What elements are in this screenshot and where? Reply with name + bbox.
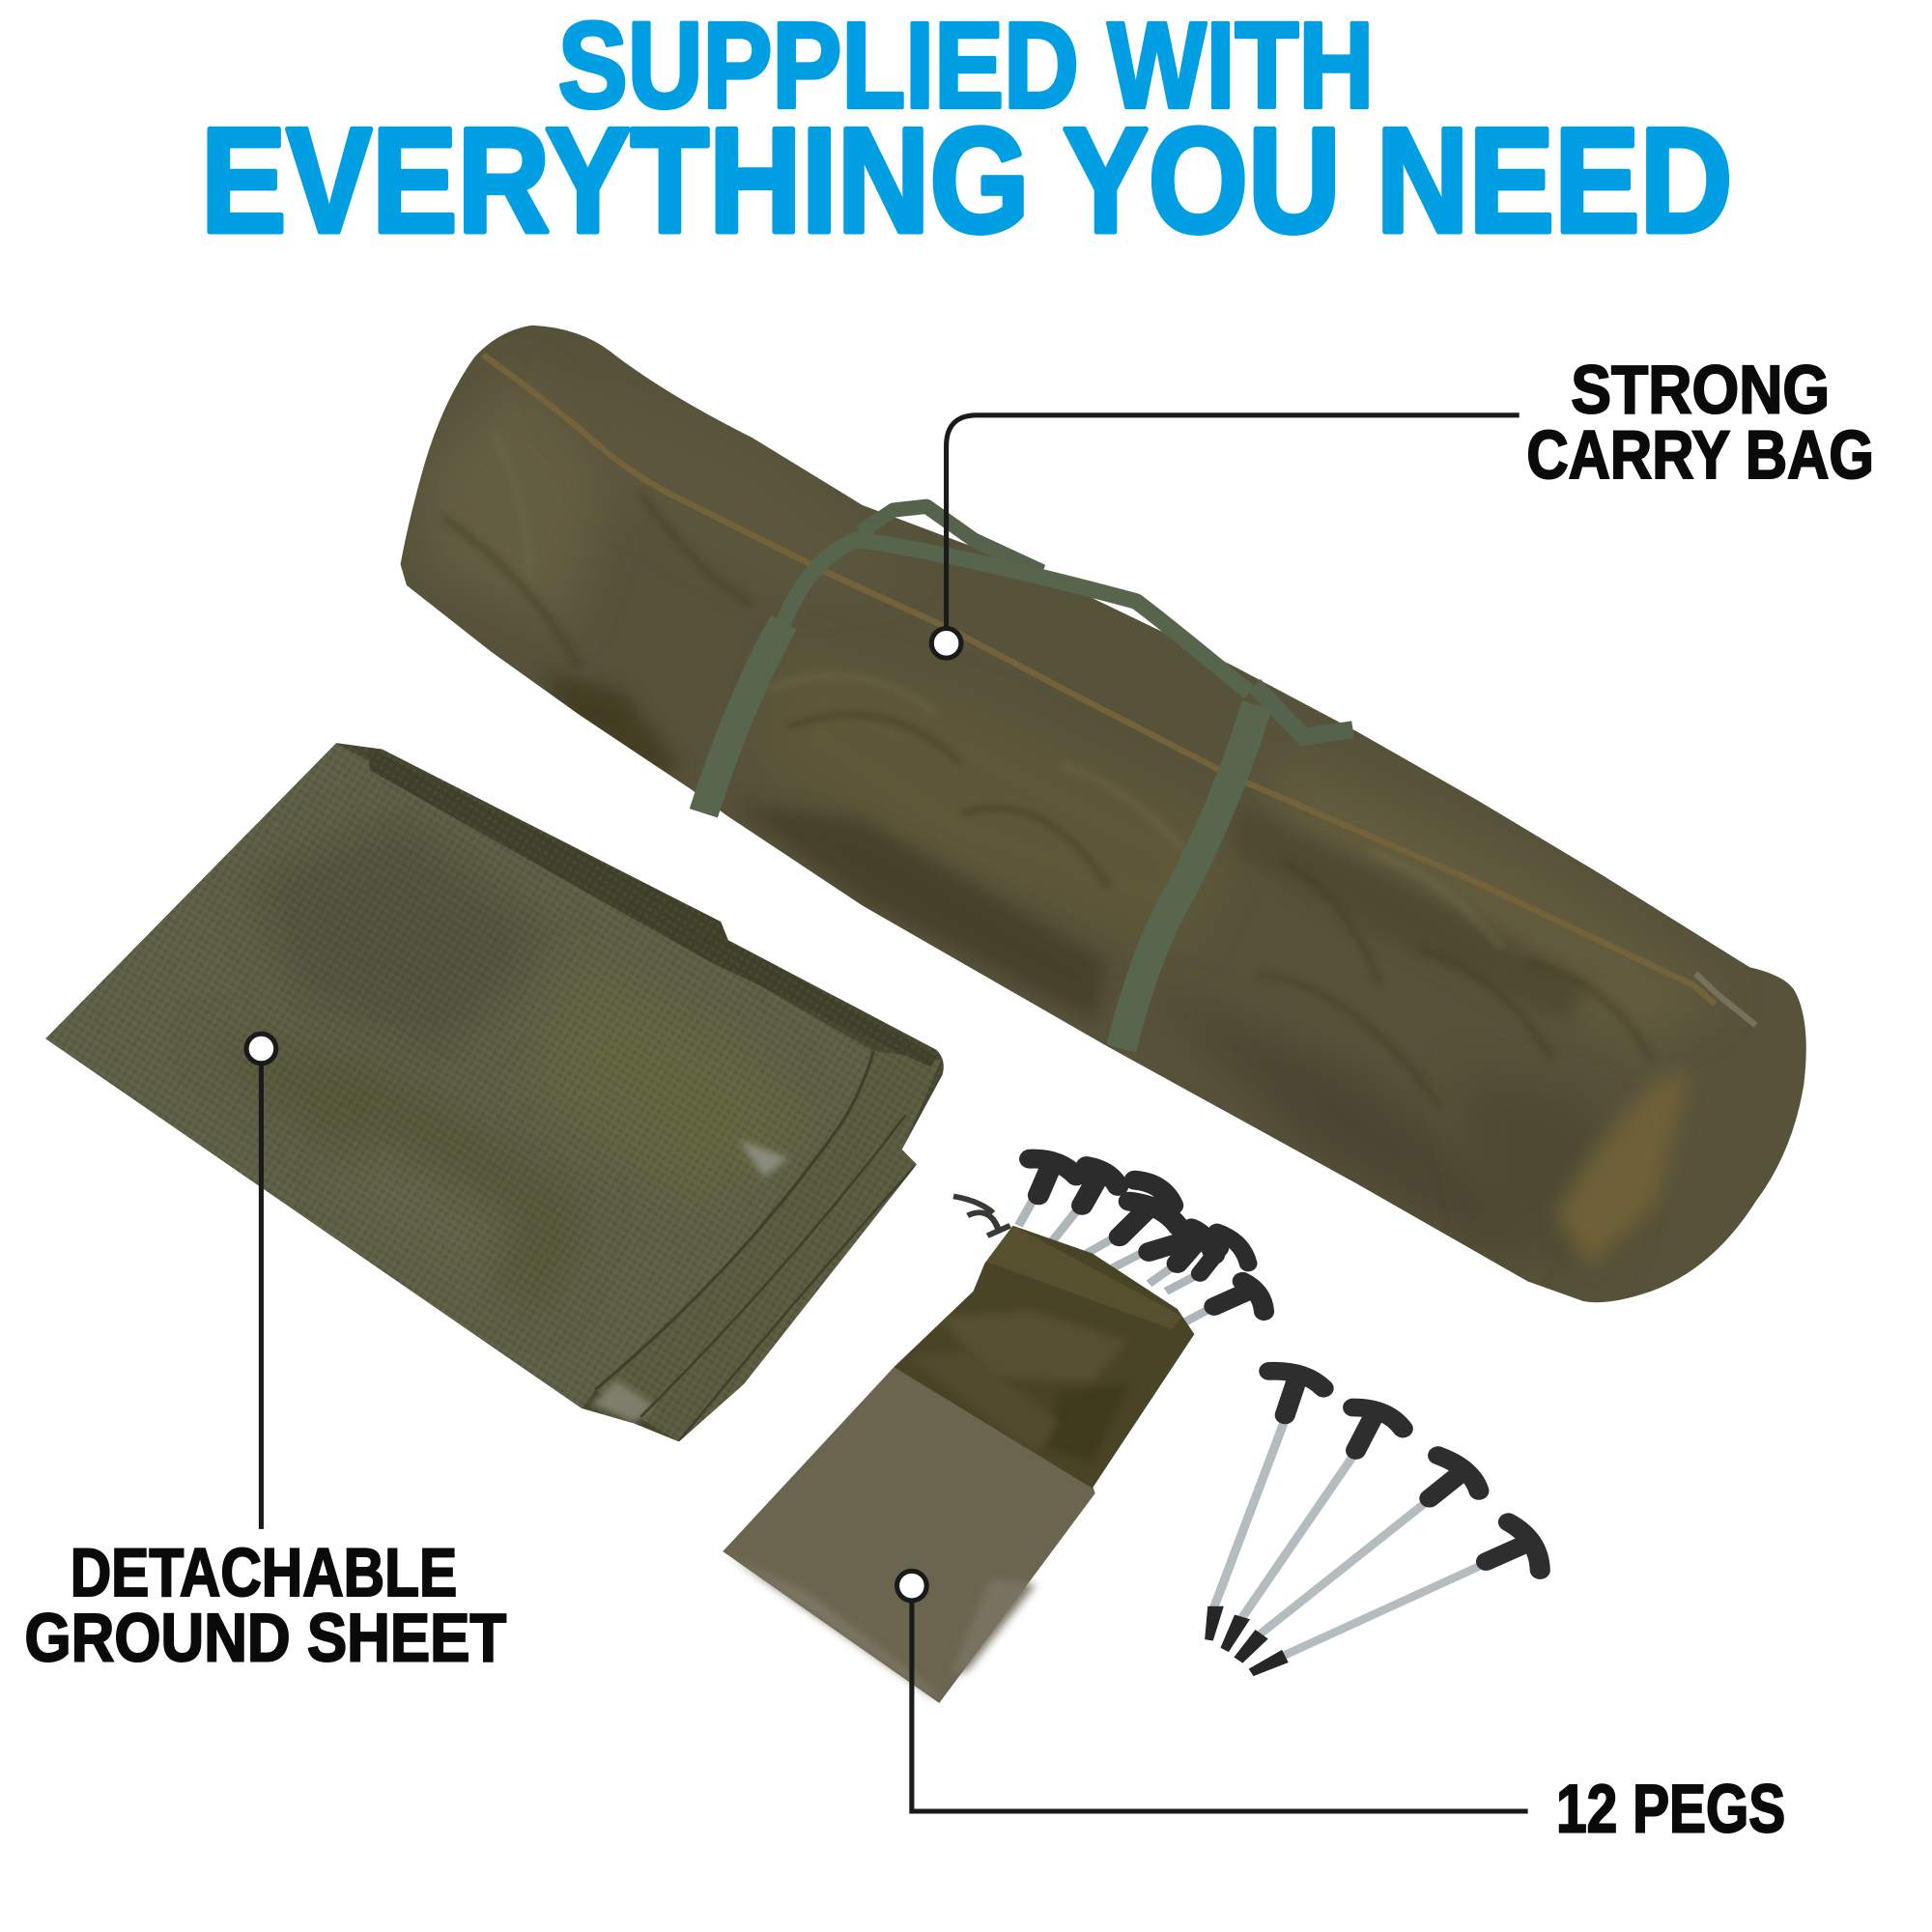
leader line [947,415,1520,629]
callout: strong carry bag [931,351,1874,658]
title line 2: EVERYTHING YOU NEED [201,97,1732,264]
title [201,0,1732,264]
pouch upper panel [894,1226,1194,1489]
pile of pegs rods [1018,1195,1214,1321]
label: DETACHABLE [71,1534,457,1610]
cord [953,1196,1010,1236]
callout: detachable ground sheet: GROUND SHEET [25,1599,506,1675]
title line 1: SUPPLIED WITH [558,0,1374,133]
callout: 12 pegs [897,1571,1785,1847]
marker dot [246,1034,276,1064]
marker dot [931,629,961,658]
loose peg 4 [1250,1522,1540,1675]
loose peg 2 [1222,1407,1403,1651]
pouch lower panel [723,1367,1095,1703]
left strap [703,622,783,813]
right strap [1254,685,1353,737]
ground sheet photo [45,739,961,1454]
zip pull [1695,974,1756,1025]
loose peg 3 [1236,1456,1479,1662]
callout: strong carry bag: CARRY BAG [1526,416,1874,493]
loose pegs [1206,1371,1540,1675]
back handle [860,506,1042,572]
callout: detachable ground sheet [25,1034,506,1675]
leader line [259,1064,263,1529]
carry bag photo [401,326,1806,1302]
pile of pegs heads [1030,1159,1264,1312]
pegs and pouch photo [723,1159,1540,1703]
label: STRONG [1571,351,1830,427]
fabric folds [443,493,1651,1109]
leader line [912,1601,1528,1811]
front handle [781,540,1249,693]
zipper [483,355,1716,1005]
loose peg 1 [1206,1371,1323,1640]
marker dot [897,1571,926,1601]
label: 12 PEGS [1556,1771,1785,1847]
